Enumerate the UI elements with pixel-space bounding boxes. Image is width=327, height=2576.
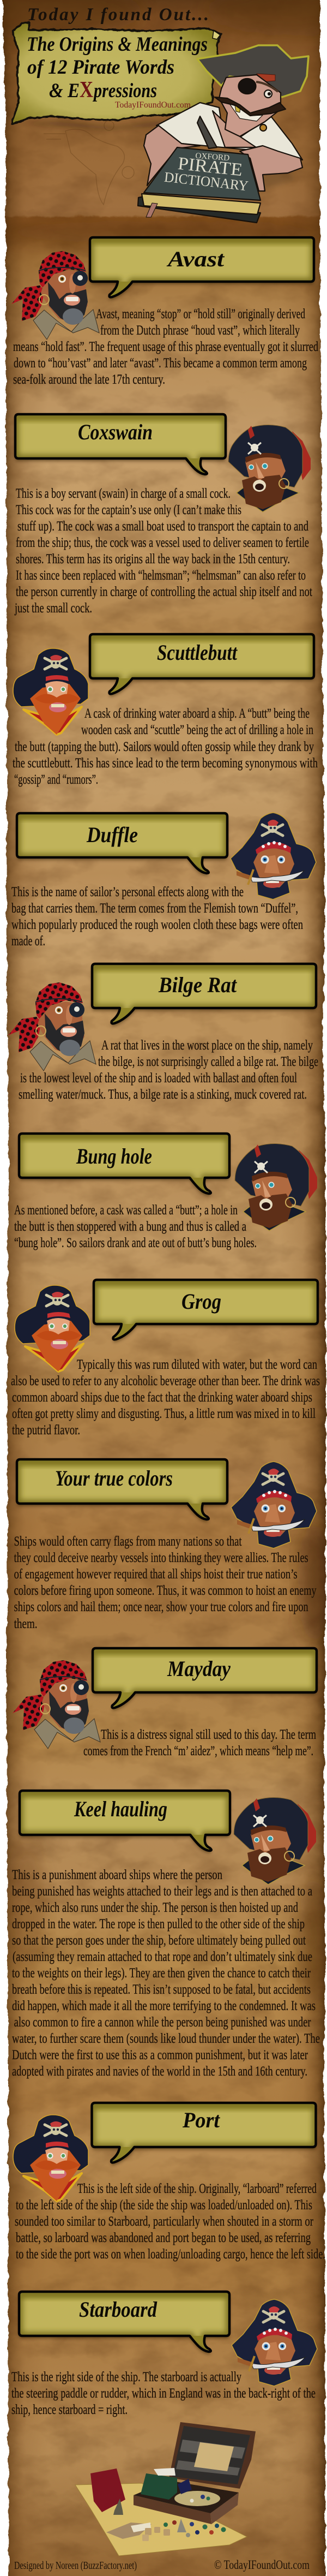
banner heading text: pressions [93, 80, 157, 102]
text: Duffle meaning [11, 885, 303, 949]
text: Coxswain meaning: This cock was for the captain’s use only (I can’t make this [16, 503, 241, 517]
speech bubble: Your true colors: Your true colors [55, 1466, 173, 1490]
text: Duffle meaning: made of. [11, 934, 45, 949]
book title text: DICTIONARY [164, 169, 249, 194]
book title text: OXFORD [195, 152, 230, 163]
text: Port meaning [15, 2181, 325, 2262]
pirate: red beard with skull hat [15, 1285, 90, 1372]
pirate: bandana and eye patch [13, 1660, 100, 1749]
panel: Bilge Rat [8, 963, 318, 1102]
pirate: knife in teeth [231, 1462, 317, 1548]
panel: Avast [11, 236, 318, 387]
text: Scuttlebutt meaning [13, 706, 318, 787]
pirate: bandana and eye patch [8, 982, 96, 1071]
text: Scuttlebutt meaning: “gossip” and “rumors”. [14, 772, 98, 787]
speech bubble: Coxswain [14, 413, 227, 477]
pirate: knife in teeth [231, 813, 316, 899]
text: Bung hole meaning: As mentioned before, a cask was called a “butt”; a hole in [14, 1203, 238, 1218]
panel: Keel hauling [12, 1790, 320, 2079]
coins and gems in the chest [174, 2491, 220, 2506]
pirate: red beard with skull hat [13, 2115, 88, 2201]
speech bubble: Port: Port [182, 2108, 221, 2132]
panel: Your true colors [14, 1458, 317, 1631]
banner heading text: The Origins & Meanings [27, 33, 208, 56]
text: Coxswain meaning [14, 486, 312, 616]
text: Your true colors meaning: Ships would often carry flags from many nations so that [14, 1534, 242, 1549]
text: Grog meaning: the putrid flavor. [12, 1423, 80, 1438]
text: Bung hole meaning: the butt is then stoppered with a bung and thus is called a [14, 1219, 246, 1234]
red pouch [90, 2468, 125, 2512]
title banner [11, 23, 221, 130]
text: Avast meaning: sea-folk around the late 17th century. [13, 372, 165, 387]
text: Starboard meaning: ship, hence starboard = right. [11, 2402, 128, 2417]
speech bubble: Your true colors [16, 1458, 229, 1522]
speech bubble: Keel hauling [19, 1790, 232, 1853]
speech bubble: Coxswain: Coxswain [78, 420, 153, 444]
illustration: treasure chest on a map [75, 2422, 256, 2556]
speech bubble: Bilge Rat [91, 963, 318, 1026]
text: Mayday meaning [83, 1727, 316, 1758]
chest base [134, 2480, 239, 2524]
speech bubble: Duffle [16, 812, 229, 876]
text: Starboard meaning [11, 2370, 316, 2417]
panel: Coxswain [14, 413, 312, 616]
text: Bilge Rat meaning [19, 1038, 318, 1102]
banner heading text [27, 33, 208, 103]
navy pouch and papers [154, 2468, 192, 2494]
speech bubble: Bung hole: Bung hole [76, 1144, 152, 1168]
book title text: PIRATE [177, 154, 244, 180]
speech bubble: Port [90, 2102, 317, 2166]
cards and dice [106, 2523, 170, 2541]
banner heading text: & E [49, 80, 80, 102]
speech bubble: Bilge Rat: Bilge Rat [158, 973, 238, 997]
text: Duffle meaning: This is the name of sailor’s personal effects along with the [11, 885, 244, 899]
text: Avast meaning [13, 307, 318, 387]
panel: Bung hole [14, 1132, 317, 1250]
pirate: brown beard captain [234, 1798, 316, 1885]
book title text [164, 152, 249, 194]
text: Coxswain meaning: This is a boy servant (swain) in charge of a small cock. [16, 486, 231, 501]
panel: Port [13, 2102, 325, 2262]
banner url: TodayIFoundOut.com [115, 100, 191, 110]
speech bubble: Duffle: Duffle [86, 822, 138, 847]
text: Keel hauling meaning: This is a punishment aboard ships where the person [12, 1868, 222, 1882]
pirate: brown beard captain [235, 1144, 317, 1231]
pirate: knife in teeth [232, 2299, 317, 2386]
text: Starboard meaning: This is the right side of the ship. The starboard is actually [11, 2370, 241, 2384]
banner heading text: X [80, 77, 93, 103]
green pouch [141, 2473, 177, 2500]
panel: Mayday [13, 1647, 318, 1758]
speech bubble: Grog [93, 1279, 319, 1343]
text: Bung hole meaning [14, 1203, 257, 1250]
map sheet [75, 2483, 247, 2556]
faint map on the header parchment [44, 121, 134, 205]
small ship figure [113, 2499, 123, 2515]
header: Today I found Out: Today I found Out... [27, 5, 209, 25]
pirate: red beard with skull hat [13, 648, 88, 735]
text: Your true colors meaning: them. [14, 1617, 38, 1631]
speech bubble: Starboard [18, 2291, 231, 2354]
text: Your true colors meaning [14, 1534, 317, 1631]
speech bubble: Scuttlebutt: Scuttlebutt [157, 640, 238, 665]
glass gems on the map [164, 2519, 226, 2537]
speech bubble: Avast [89, 236, 316, 300]
chest lid [169, 2422, 256, 2489]
illustration: pirate holding the dictionary [138, 45, 308, 223]
pirate: bandana and eye patch [11, 251, 99, 339]
speech bubble: Mayday: Mayday [167, 1656, 231, 1681]
pirate: brown beard captain [228, 425, 311, 512]
banner heading text: of 12 Pirate Words [27, 56, 174, 79]
text: Grog meaning [11, 1357, 320, 1438]
speech bubble: Avast: Avast [166, 247, 225, 271]
speech bubble: Keel hauling: Keel hauling [74, 1797, 167, 1821]
speech bubble: Scuttlebutt [89, 633, 316, 696]
panel: Starboard [11, 2291, 317, 2417]
panel: Duffle [11, 812, 316, 949]
speech bubble: Starboard: Starboard [79, 2297, 158, 2322]
speech bubble: Grog: Grog [181, 1289, 221, 1314]
panel: Scuttlebutt [13, 633, 318, 787]
speech bubble: Bung hole [18, 1132, 231, 1196]
panel: Grog [11, 1279, 320, 1438]
speech bubble: Mayday [92, 1647, 318, 1710]
text: Keel hauling meaning [12, 1868, 320, 2079]
text: Coxswain meaning: just the small cock. [14, 601, 92, 616]
footer: designer credit: Designed by Noreen (BuzzFactory.net) [14, 2560, 137, 2572]
